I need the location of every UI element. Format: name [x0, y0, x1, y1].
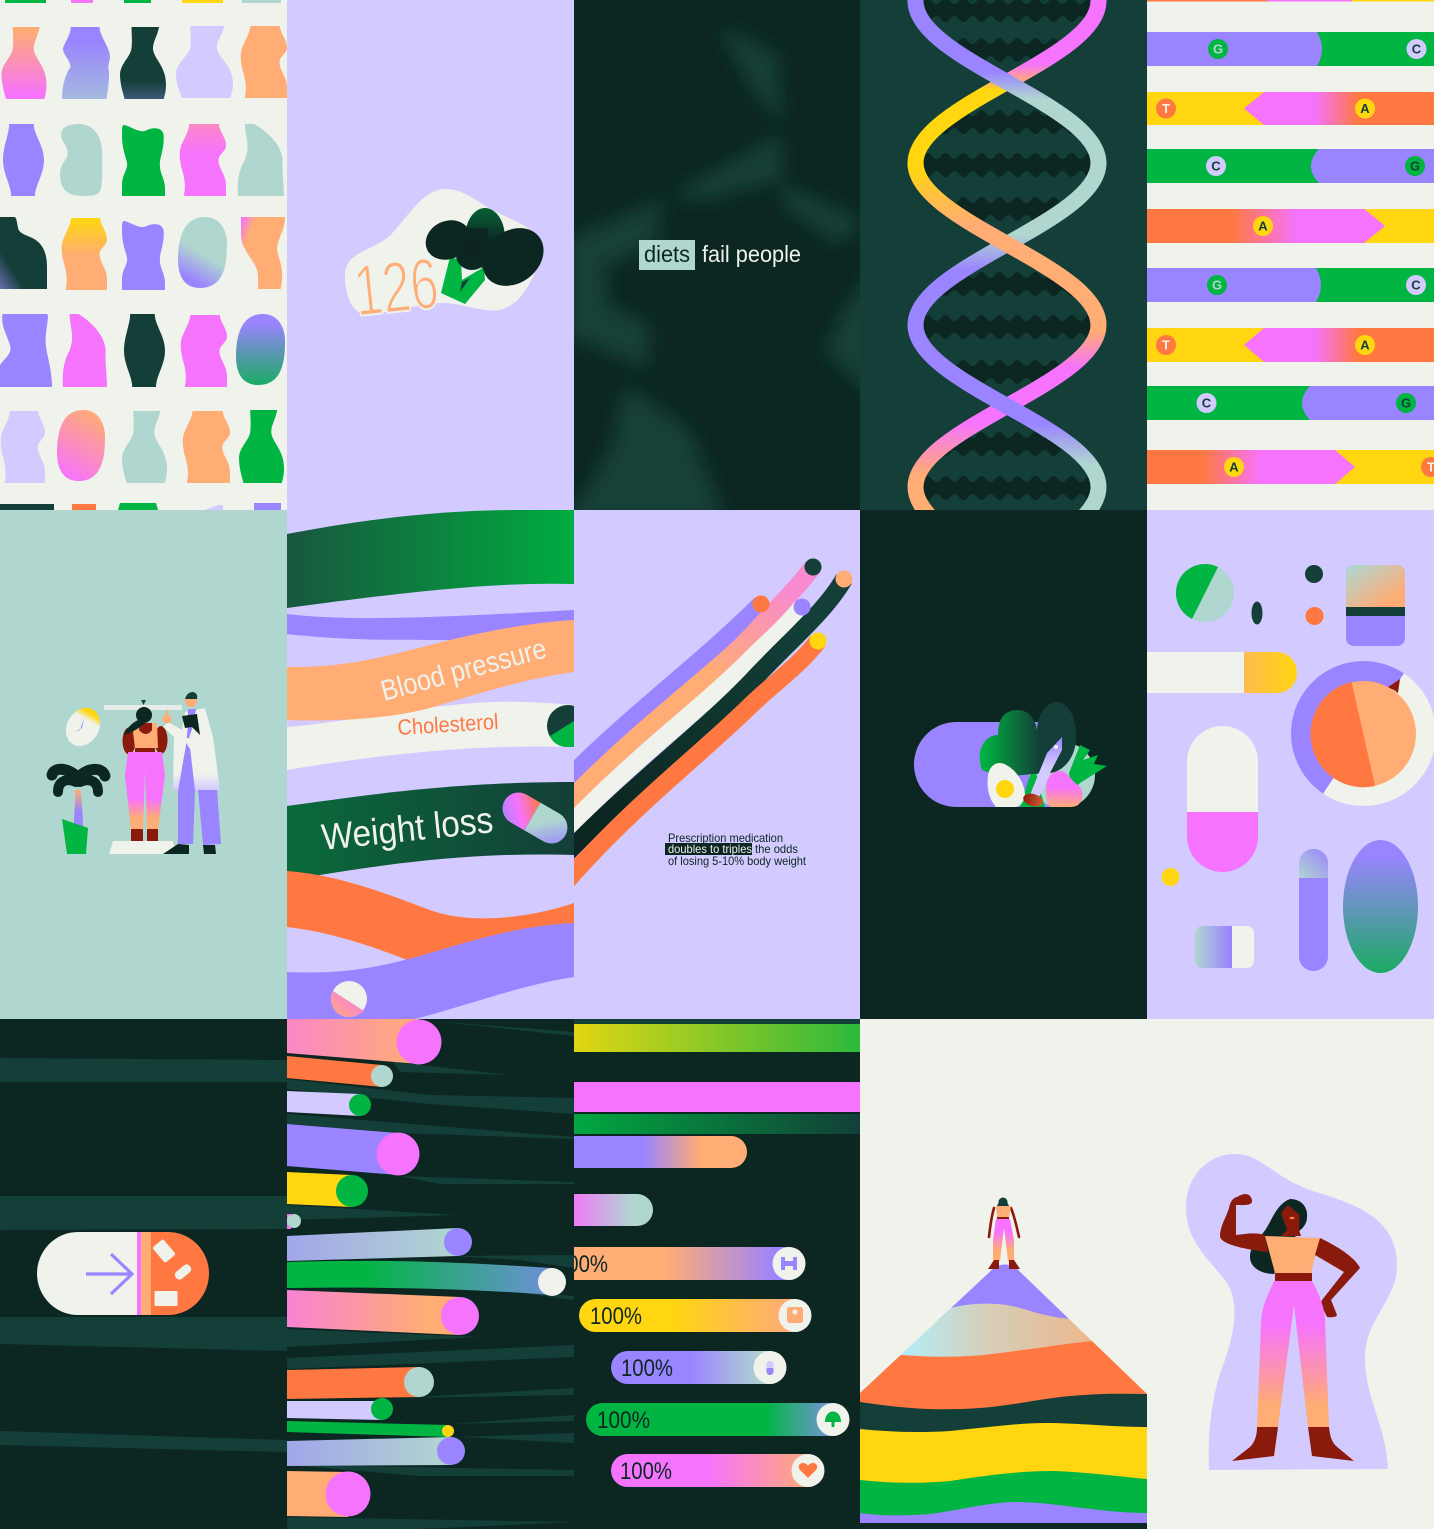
- bar 7: [287, 1228, 472, 1261]
- bar 14: [287, 1471, 370, 1517]
- icon: scale: [787, 1307, 803, 1323]
- panel: 100 percent progress bars: [556, 1019, 860, 1529]
- doctor: [162, 692, 221, 854]
- capsule with arrow: [37, 1232, 209, 1315]
- text: fail people: fail people: [702, 241, 801, 267]
- progress bar 2: [579, 1299, 812, 1332]
- bar 8: [287, 1261, 566, 1296]
- bar 13: [287, 1437, 465, 1466]
- green wave: [287, 510, 574, 608]
- icon: scale dial: [59, 702, 107, 752]
- line end dots: [752, 558, 852, 650]
- icon: tree: [825, 1412, 841, 1427]
- strip: C G repeat: C: [1202, 396, 1212, 410]
- strip: T A: A: [1360, 101, 1370, 116]
- orange wave: [287, 871, 574, 965]
- icon: capsule: [502, 792, 568, 844]
- woman flexing: [1220, 1194, 1360, 1461]
- strip: A: [1147, 209, 1434, 243]
- strand B crossing on top: [916, 163, 1098, 325]
- panel: broccoli and 126: [287, 0, 574, 510]
- progress bar 1: 100%: [556, 1251, 608, 1278]
- striped mountain: [860, 1260, 1147, 1529]
- number 126: 126: [350, 244, 442, 332]
- bar 11: [287, 1398, 393, 1420]
- icon: arrow: [86, 1254, 132, 1294]
- panel: strong woman: [1147, 1019, 1434, 1529]
- icon: small tablet: [1195, 926, 1254, 968]
- strip: T A: T: [1162, 101, 1170, 116]
- icon: ring pill: [1291, 661, 1434, 806]
- panel: nucleotide strips: [1147, 0, 1434, 510]
- purple wave: [287, 923, 574, 1020]
- strip: C G: [1147, 149, 1434, 183]
- dark green wave: [287, 782, 574, 880]
- hair: [1250, 1199, 1307, 1274]
- body shape row 4: [0, 314, 285, 387]
- panel: pills and tablets: [1147, 510, 1434, 1019]
- lilac blob: [1186, 1154, 1397, 1470]
- small woman figure: [988, 1198, 1020, 1269]
- progress bar 3: [611, 1351, 786, 1384]
- bar 3: [287, 1091, 371, 1116]
- panel: DNA helix: [860, 0, 1147, 510]
- trajectory lines chart: [564, 567, 844, 884]
- panel: prescription medication trajectories: [564, 510, 860, 1019]
- text block: prescription medication: Prescription medication: [668, 831, 783, 845]
- icon: pie tablet: [1176, 564, 1234, 622]
- top row of cropped shapes: [5, 0, 281, 3]
- cream wave: [287, 702, 574, 770]
- bar 6: [287, 1214, 301, 1229]
- progress bar 5: [611, 1454, 824, 1487]
- icon: gradient oval: [1343, 840, 1418, 973]
- background streaks: [0, 1058, 287, 1452]
- height ruler: [104, 700, 182, 710]
- strip: G C: G: [1213, 42, 1223, 56]
- trousers: [1257, 1281, 1329, 1427]
- boots: [1232, 1427, 1354, 1461]
- strand B: [908, 0, 1106, 510]
- text block: prescription medication: [665, 831, 807, 868]
- text: Blood pressure: Blood pressure: [378, 633, 550, 708]
- strip: G C repeat: [1147, 268, 1434, 302]
- icon: leek: [1069, 745, 1107, 792]
- panel: woman on mountain: [860, 1019, 1147, 1529]
- crop top: [1265, 1236, 1320, 1273]
- body shape row 3: [0, 217, 285, 290]
- icon: capsule contents: [152, 1239, 193, 1306]
- panel: body shapes pattern: [0, 0, 287, 510]
- strip: A T: [1147, 450, 1434, 484]
- strip: C G: G: [1410, 158, 1420, 174]
- bar 12: [287, 1421, 454, 1437]
- progress bar 2: 100%: [590, 1303, 642, 1330]
- panel: arrow pill: [0, 1019, 287, 1529]
- progress bar 5: 100%: [620, 1458, 672, 1485]
- icon: tall pill: [1299, 849, 1328, 971]
- icon: broccoli leaves: [980, 702, 1076, 777]
- bar 1: [287, 1019, 442, 1064]
- neck and face: [1281, 1205, 1301, 1236]
- body shape row 2: [3, 124, 284, 196]
- purple wave: [287, 610, 574, 640]
- blurred background figure: [574, 32, 860, 510]
- icon: dark dot: [1305, 565, 1323, 583]
- text: diets: diets: [644, 241, 690, 267]
- icon: dumbbell: [781, 1257, 797, 1270]
- icon: fish: [1030, 737, 1062, 797]
- bottom row of cropped shapes: [0, 503, 281, 510]
- bar 9: [287, 1290, 479, 1335]
- strip: T A repeat: T: [1162, 338, 1170, 352]
- text block: prescription medication: the odds: [755, 842, 798, 856]
- icon: pink vegetable: [1046, 771, 1082, 807]
- strip: T A repeat: A: [1360, 338, 1370, 352]
- strand A: [908, 0, 1106, 510]
- icon: bean: [1022, 792, 1044, 808]
- strip: C G repeat: [1147, 386, 1434, 420]
- icon: pill: [766, 1361, 774, 1375]
- peach wave with label: [287, 620, 574, 720]
- highlighted word: [639, 240, 695, 270]
- text: Cholesterol: Cholesterol: [397, 709, 499, 740]
- icon: yellow dot: [1162, 868, 1180, 886]
- panel: food on purple pill: [860, 510, 1147, 1019]
- icon: dark oval pill: [1252, 602, 1262, 624]
- strip: C G repeat: G: [1401, 396, 1411, 410]
- icon: vertical capsule: [1187, 726, 1258, 872]
- background streaks: [287, 1021, 574, 1529]
- progress bar 4: 100%: [597, 1407, 650, 1434]
- icon: gradient tablet: [1346, 565, 1405, 646]
- purple pill: [914, 722, 1060, 807]
- icon: horizontal capsule: [1147, 652, 1297, 693]
- strip: T A: [1147, 92, 1434, 125]
- panel: blood pressure, cholesterol, weight loss waves: [287, 510, 589, 1020]
- strip: A: A: [1258, 218, 1268, 234]
- icon: heart: [799, 1463, 817, 1478]
- bar 5: [287, 1172, 368, 1207]
- icon: orange dot: [1306, 607, 1324, 625]
- strip: G C: [1147, 32, 1434, 66]
- strip: G C repeat: C: [1411, 278, 1421, 292]
- progress bar 3: 100%: [621, 1355, 673, 1382]
- icon: broccoli: [419, 208, 555, 304]
- panel: doctor and patient: [0, 510, 287, 1019]
- icon: egg: [987, 763, 1025, 807]
- progress bar 1: [556, 1247, 806, 1280]
- panel: speed bars: [287, 1019, 574, 1529]
- arm on hip: [1315, 1238, 1360, 1317]
- text block: prescription medication: doubles to triples: [668, 842, 752, 856]
- text block: prescription medication: of losing 5-10% body weight: [668, 854, 807, 868]
- top gradient bars: [574, 1019, 860, 1226]
- plant: [52, 769, 105, 854]
- progress bar 4: [586, 1403, 850, 1436]
- strip: A T: A: [1229, 460, 1239, 474]
- panel: diets fail people: [574, 32, 860, 510]
- lips: [1290, 1217, 1294, 1219]
- top edge strip: [1147, 0, 1434, 2]
- strip: G C: C: [1412, 42, 1422, 56]
- waistband: [1275, 1273, 1312, 1281]
- body shape row 1: [2, 26, 287, 99]
- food bowl: [1029, 742, 1095, 808]
- strip: T A repeat: [1147, 328, 1434, 362]
- bar 4: [287, 1124, 420, 1176]
- cream blob: [345, 189, 539, 315]
- patient on scale: [109, 707, 176, 854]
- green leaf base: [1020, 772, 1045, 807]
- body shape row 5: [1, 410, 284, 483]
- strip: G C repeat: G: [1212, 278, 1222, 292]
- bar 10: [287, 1367, 434, 1399]
- strip: C G: C: [1211, 158, 1221, 174]
- bar 2: [287, 1056, 393, 1087]
- raised arm: [1220, 1194, 1268, 1252]
- icon: round pill: [331, 981, 367, 1017]
- text: Weight loss: Weight loss: [320, 799, 495, 858]
- icon: green capsule circle: [547, 705, 574, 747]
- helix rungs: [924, 0, 1090, 500]
